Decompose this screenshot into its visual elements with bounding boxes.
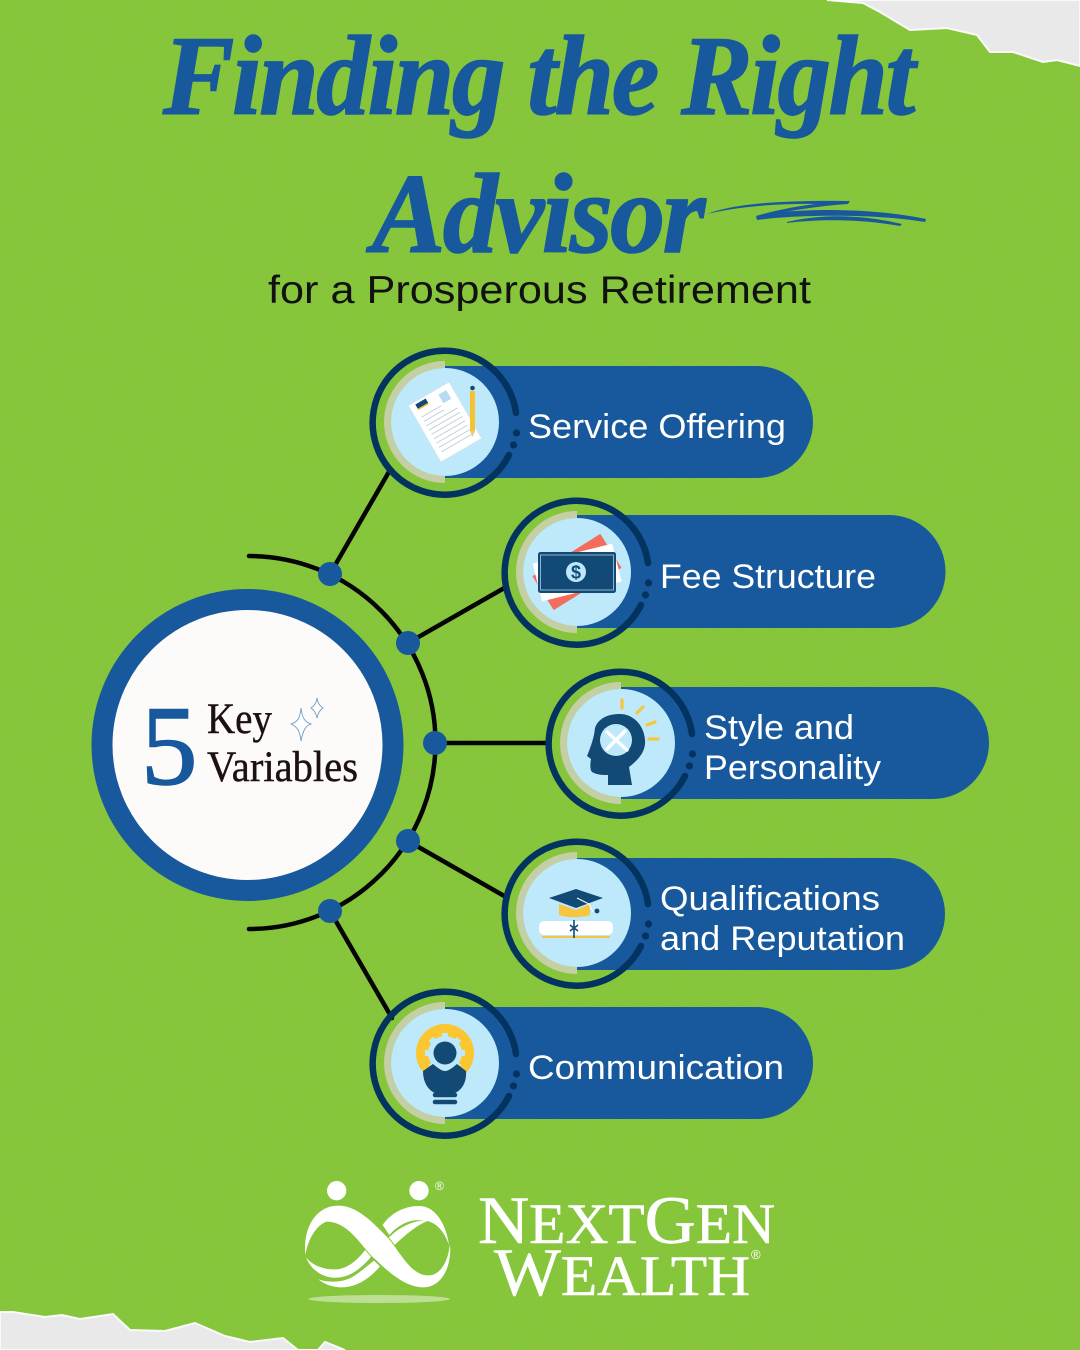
item 4: Qualifications and Reputation: and Reputation xyxy=(660,920,905,958)
central circle: 5 Key Variables: 5 xyxy=(141,684,198,809)
wordmark: WEALTH xyxy=(494,1234,750,1310)
torn paper: bottom left corner xyxy=(0,1312,345,1350)
central circle: 5 Key Variables xyxy=(102,600,393,890)
title: Finding the Right xyxy=(162,14,919,139)
icon: sparkles xyxy=(291,698,323,741)
item 5: Communication xyxy=(373,992,813,1136)
wordmark: NEXTGEN xyxy=(478,1182,775,1258)
icon: dollar bill: $ xyxy=(571,562,581,582)
icon: head with tools xyxy=(587,700,658,785)
icon: dollar bill xyxy=(532,534,622,610)
subtitle: for a Prosperous Retirement xyxy=(268,269,811,312)
item 1: Service Offering xyxy=(373,351,813,495)
item 3: Style and Personality: Personality xyxy=(704,749,881,787)
item 3: Style and Personality: Style and xyxy=(704,709,854,747)
icon: graduation cap and diploma xyxy=(539,889,613,938)
connector dots xyxy=(318,562,447,923)
logo: NextGen Wealth xyxy=(305,1179,775,1310)
torn paper: top right corner xyxy=(827,0,1080,66)
item 3: Style and Personality xyxy=(549,672,989,816)
item 4: Qualifications and Reputation: Qualifications xyxy=(660,880,880,918)
item 1: Service Offering: Service Offering xyxy=(528,408,786,446)
icon: light bulb with person xyxy=(416,1024,474,1102)
item 2: Fee Structure: Fee Structure xyxy=(660,558,876,596)
central circle: 5 Key Variables: Key xyxy=(207,696,272,743)
title: Advisor xyxy=(366,152,706,277)
logo shadow xyxy=(308,1295,450,1303)
item 4: Qualifications and Reputation xyxy=(505,842,945,986)
item 2: Fee Structure xyxy=(505,501,945,645)
central circle: 5 Key Variables: Variables xyxy=(207,744,358,791)
connector lines xyxy=(249,470,548,1018)
wordmark xyxy=(478,1182,775,1310)
icon: infinity figures mark: ® xyxy=(435,1179,444,1193)
item 5: Communication: Communication xyxy=(528,1049,784,1087)
icon: infinity figures mark xyxy=(305,1179,450,1287)
icon: document and pencil xyxy=(408,382,482,462)
icon: brush swoosh xyxy=(707,201,926,226)
title xyxy=(162,14,919,277)
wordmark: ® xyxy=(751,1247,761,1262)
